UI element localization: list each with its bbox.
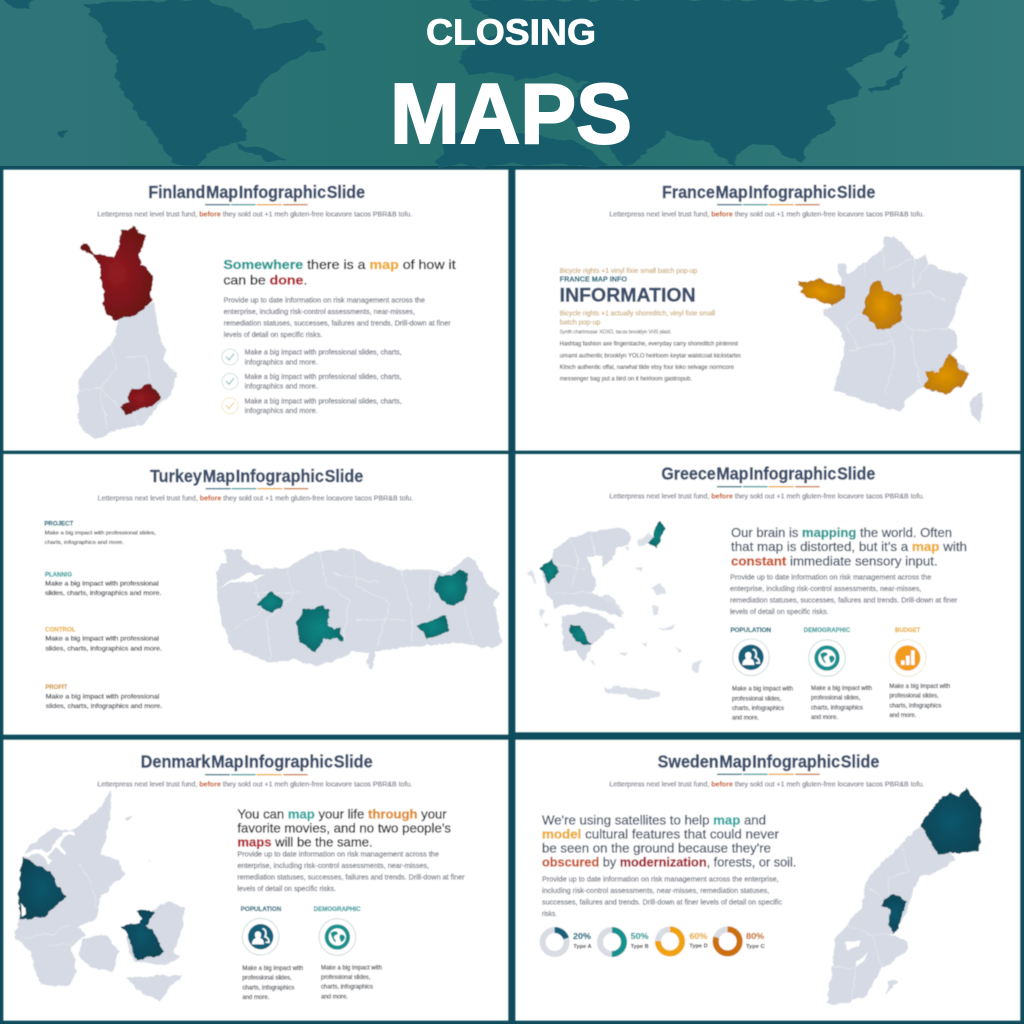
title underline <box>717 486 820 487</box>
checklist: Make a big impact with professional slides, charts, <box>245 398 402 405</box>
body text <box>542 876 783 918</box>
heading: model cultural features that could never <box>542 826 780 841</box>
checklist <box>222 349 402 415</box>
body text <box>730 574 958 616</box>
heading: be seen on the ground because they're <box>542 840 771 855</box>
item: profit: slides, charts, infographics and more. <box>46 703 162 710</box>
body text: levels of detail on specific risks. <box>237 886 336 893</box>
body text: remediation statuses, successes, failures and trends. Drill-down at finer <box>237 874 465 881</box>
stat: demographic: professional slides, <box>321 975 371 981</box>
stat: population: POPULATION <box>730 627 771 634</box>
panel: Sweden slide <box>515 740 1020 1021</box>
stat: demographic: professional slides, <box>811 696 861 702</box>
title: Sweden: Sweden Map Infographic Slide <box>658 751 880 771</box>
stat: demographic: DEMOGRAPHIC <box>804 627 850 634</box>
body text: Provide up to date information on risk management across the <box>224 297 425 304</box>
stat: population: charts, infographics <box>732 706 784 712</box>
stat: population: professional slides, <box>242 976 292 982</box>
body text: risks. <box>542 911 557 918</box>
item: profit: PROFIT <box>45 684 67 691</box>
subtitle: Letterpress next level trust fund, before they sold out +1 meh gluten-free locavore tacos PBR&B tofu. <box>97 782 412 789</box>
text block: France info: messenger bag put a bird on it heirloom gastropub. <box>560 375 692 382</box>
donut: Type D <box>658 929 708 953</box>
map: Finland <box>77 226 177 440</box>
header title: maps: MAPS <box>390 67 632 162</box>
stat: demographic: and more. <box>811 715 838 721</box>
body text: levels of detail on specific risks. <box>730 609 829 616</box>
subtitle: Letterpress next level trust fund, before they sold out +1 meh gluten-free locavore tacos PBR&B tofu. <box>609 781 924 788</box>
checklist: Make a big impact with professional slides, charts, <box>245 374 402 381</box>
title underline <box>717 774 820 775</box>
stat: budget: BUDGET <box>895 627 920 634</box>
text block: France info: INFORMATION <box>560 285 696 306</box>
body text: including risk-control assessments, near-misses, remediation statuses, <box>542 888 769 895</box>
checklist: infographics and more. <box>245 384 318 391</box>
stat: demographic: charts, infographics <box>811 705 863 711</box>
checklist: infographics and more. <box>245 408 318 415</box>
item: planning: slides, charts, infographics and more. <box>45 590 161 597</box>
panel: Turkey slide <box>3 454 508 735</box>
stat: budget <box>889 627 950 719</box>
body text: Provide up to date information on risk management across the <box>730 574 931 581</box>
heading: We're using satellites to help map and <box>542 812 766 827</box>
text block: France info: Bicycle rights +1 actually shoreditch, vinyl fixie small <box>560 308 715 317</box>
title underline <box>206 488 308 489</box>
heading <box>731 525 967 568</box>
item: control: CONTROL <box>45 627 76 634</box>
stat: population <box>241 906 303 1001</box>
map: Sweden <box>827 788 982 1005</box>
text block: France info <box>560 266 742 382</box>
stat: population: Make a big impact with <box>242 966 303 972</box>
item: planning: Make a big impact with professional <box>45 580 159 587</box>
panel: Greece slide <box>515 454 1020 732</box>
stat: demographic <box>804 627 872 721</box>
world map silhouette <box>7 0 960 166</box>
subtitle: Letterpress next level trust fund, before they sold out +1 meh gluten-free locavore tacos PBR&B tofu. <box>98 496 413 503</box>
heading: that map is distorted, but it's a map with <box>731 539 967 554</box>
map: Denmark <box>15 790 185 1001</box>
item: project: charts, infographics and more. <box>45 540 124 546</box>
item: project: Make a big impact with professional slides, <box>45 530 156 536</box>
title: Turkey: Turkey Map Infographic Slide <box>150 466 364 486</box>
heading <box>542 812 796 870</box>
title underline <box>205 774 308 775</box>
donut: Type D: 60% <box>689 931 708 941</box>
donut: Type B: Type B <box>631 944 649 950</box>
text block: France info: batch pop-up <box>560 317 600 326</box>
item: control <box>45 627 162 652</box>
stat: population: charts, infographics <box>242 985 294 991</box>
heading: Somewhere there is a map of how it <box>223 257 456 272</box>
donut: Type C: 80% <box>746 931 765 941</box>
donut: Type B <box>600 930 649 954</box>
text block: France info: Bicycle rights +1 vinyl fixie small batch pop-up <box>560 266 697 275</box>
donut: Type A: Type A <box>573 944 592 950</box>
heading: Our brain is mapping the world. Often <box>731 525 952 540</box>
donut: Type A: 20% <box>573 931 591 941</box>
title: Finland: Finland Map Infographic Slide <box>148 182 365 202</box>
donut: Type A <box>543 930 592 954</box>
body text: successes, failures and trends. Drill-down at finer levels of detail on specific <box>542 900 783 907</box>
item: control: slides, charts, infographics and more. <box>45 645 162 652</box>
body text: enterprise, including risk-control assessments, near-misses, <box>237 863 429 870</box>
header banner <box>0 0 1024 166</box>
item: profit <box>45 684 162 710</box>
stat: demographic <box>314 906 382 1000</box>
checklist: infographics and more. <box>245 359 318 366</box>
stat: budget: Make a big impact with <box>889 684 950 690</box>
stat: budget: charts, infographics <box>889 703 941 709</box>
body text: remediation statuses, successes, failures and trends. Drill-down at finer <box>730 597 958 604</box>
item: project <box>44 520 156 546</box>
body text <box>237 851 465 893</box>
donut: Type C <box>716 929 765 953</box>
title underline <box>717 204 820 205</box>
subtitle: Letterpress next level trust fund, before they sold out +1 meh gluten-free locavore tacos PBR&B tofu. <box>609 212 924 219</box>
stat: population: and more. <box>732 716 759 722</box>
panel: Denmark slide <box>3 740 508 1021</box>
heading: favorite movies, and no two people's <box>237 820 451 835</box>
stat: demographic: Make a big impact with <box>811 686 872 692</box>
item: profit: Make a big impact with professional <box>46 693 160 700</box>
panel: Finland slide <box>3 170 508 451</box>
map: France <box>797 236 984 423</box>
stat: population: Make a big impact with <box>732 687 793 693</box>
donut: Type B: 50% <box>631 931 649 941</box>
stat: population: professional slides, <box>732 696 782 702</box>
text block: France info: Kitsch authentic offal, narwhal tilde etsy four loko selvage normcore <box>560 364 734 371</box>
text block: France info: umami authentic brooklyn YOLO heirloom keytar waistcoat kickstarter. <box>560 353 742 360</box>
body text: enterprise, including risk-control assessments, near-misses, <box>730 586 921 593</box>
body text: enterprise, including risk-control assessments, near-misses, <box>224 309 415 316</box>
title underline <box>205 204 308 205</box>
stat: demographic: Make a big impact with <box>321 965 382 971</box>
heading: You can map your life through your <box>237 806 447 821</box>
stat: demographic: and more. <box>321 994 348 1000</box>
map: Greece <box>527 521 702 699</box>
item: project: PROJECT <box>44 520 73 527</box>
body text: Provide up to date information on risk management across the <box>237 851 439 858</box>
heading: constant immediate sensory input. <box>731 553 938 568</box>
stat: population <box>730 627 793 722</box>
title: Denmark: Denmark Map Infographic Slide <box>141 751 373 771</box>
item: planning <box>45 572 161 597</box>
body text: Provide up to date information on risk management across the enterprise, <box>542 876 779 883</box>
donut: Type C: Type C <box>746 944 765 950</box>
stat: demographic: DEMOGRAPHIC <box>314 906 361 913</box>
heading line 2: can be done. <box>223 273 307 288</box>
body text: levels of detail on specific risks. <box>224 332 322 339</box>
item: control: Make a big impact with professional <box>45 636 160 643</box>
stat: population: POPULATION <box>241 906 281 913</box>
panel: France slide <box>515 170 1020 451</box>
body text <box>224 297 451 339</box>
heading: maps will be the same. <box>237 835 373 850</box>
stat: budget: and more. <box>889 713 917 719</box>
title: Greece: Greece Map Infographic Slide <box>661 463 876 483</box>
subtitle: Letterpress next level trust fund, before they sold out +1 meh gluten-free locavore tacos PBR&B tofu. <box>97 212 412 219</box>
text block: France info: Hashtag fashion axe fingerstache, everyday carry shoreditch pinterest <box>560 341 738 348</box>
item: planning: PLANNIG <box>45 572 72 579</box>
header title: closing: CLOSING <box>426 12 596 52</box>
stat: demographic: charts, infographics <box>321 985 373 991</box>
title: France: France Map Infographic Slide <box>662 182 876 202</box>
text block: France info: Synth chartreusar XOXO, tacos brooklyn VHS plaid. <box>560 330 671 336</box>
subtitle: Letterpress next level trust fund, before they sold out +1 meh gluten-free locavore tacos PBR&B tofu. <box>609 493 924 500</box>
checklist: Make a big impact with professional slides, charts, <box>245 350 402 357</box>
heading <box>237 806 451 850</box>
text block: France info: FRANCE MAP INFO <box>560 275 627 284</box>
stat: budget: professional slides, <box>889 694 939 700</box>
body text: remediation statuses, successes, failures and trends. Drill-down at finer <box>224 320 451 327</box>
heading: obscured by modernization, forests, or soil. <box>542 855 796 870</box>
map: Turkey <box>217 549 502 670</box>
donut: Type D: Type D <box>689 944 708 950</box>
stat: population: and more. <box>242 995 270 1001</box>
